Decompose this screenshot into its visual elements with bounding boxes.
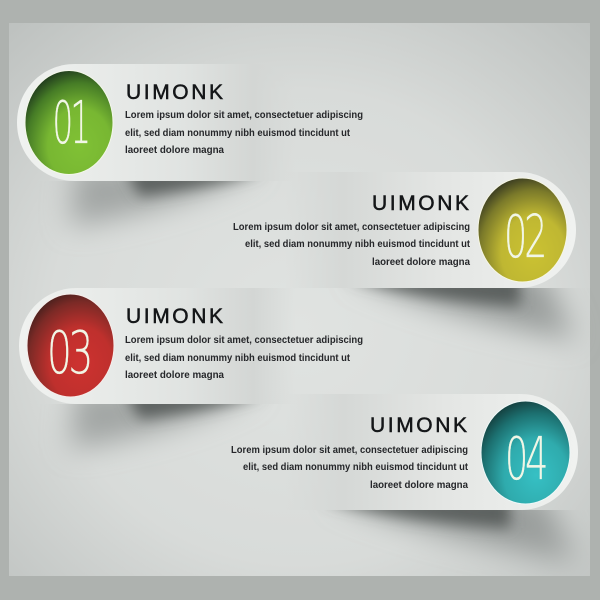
- circle badge 02: [478, 178, 567, 282]
- circle badge 03: [27, 294, 114, 397]
- shadow: panel 2: [345, 272, 575, 340]
- body text: [233, 222, 471, 268]
- heading: UIMONK: [370, 414, 467, 437]
- body text: elit, sed diam nonummy nibh euismod tincidunt ut: [243, 462, 469, 473]
- body text: laoreet dolore magna: [125, 370, 225, 381]
- number 04: 04: [505, 424, 546, 493]
- pill background: [17, 64, 295, 181]
- shadow: panel 4: [327, 510, 578, 570]
- shadow: panel 3: [70, 388, 265, 449]
- body text: laoreet dolore magna: [370, 480, 469, 491]
- body text: [125, 335, 363, 381]
- body text: Lorem ipsum dolor sit amet, consectetuer adipiscing: [125, 110, 363, 121]
- circle badge 01: [25, 70, 113, 174]
- panel 3: red: [19, 288, 363, 404]
- body text: [231, 445, 469, 491]
- body text: elit, sed diam nonummy nibh euismod tincidunt ut: [125, 128, 351, 139]
- body text: elit, sed diam nonummy nibh euismod tincidunt ut: [125, 353, 351, 364]
- body text: elit, sed diam nonummy nibh euismod tincidunt ut: [245, 239, 471, 250]
- heading: UIMONK: [372, 192, 469, 215]
- number 02: 02: [504, 202, 544, 271]
- body text: [125, 110, 363, 156]
- heading: UIMONK: [126, 81, 223, 104]
- pill background: [285, 172, 576, 288]
- panel 4: teal: [231, 394, 578, 510]
- body text: laoreet dolore magna: [372, 257, 471, 268]
- panel 1: green: [17, 64, 363, 181]
- body text: laoreet dolore magna: [125, 145, 225, 156]
- body text: Lorem ipsum dolor sit amet, consectetuer adipiscing: [125, 335, 363, 346]
- body text: Lorem ipsum dolor sit amet, consectetuer adipiscing: [233, 222, 470, 233]
- shadow: panel 1: [70, 165, 265, 226]
- number 01: 01: [52, 90, 88, 158]
- number 03: 03: [47, 319, 90, 387]
- pill background: [285, 394, 578, 510]
- body text: Lorem ipsum dolor sit amet, consectetuer adipiscing: [231, 445, 468, 456]
- circle badge 04: [481, 401, 570, 504]
- heading: UIMONK: [126, 305, 223, 328]
- panel 2: yellow: [233, 172, 576, 288]
- pill background: [19, 288, 295, 404]
